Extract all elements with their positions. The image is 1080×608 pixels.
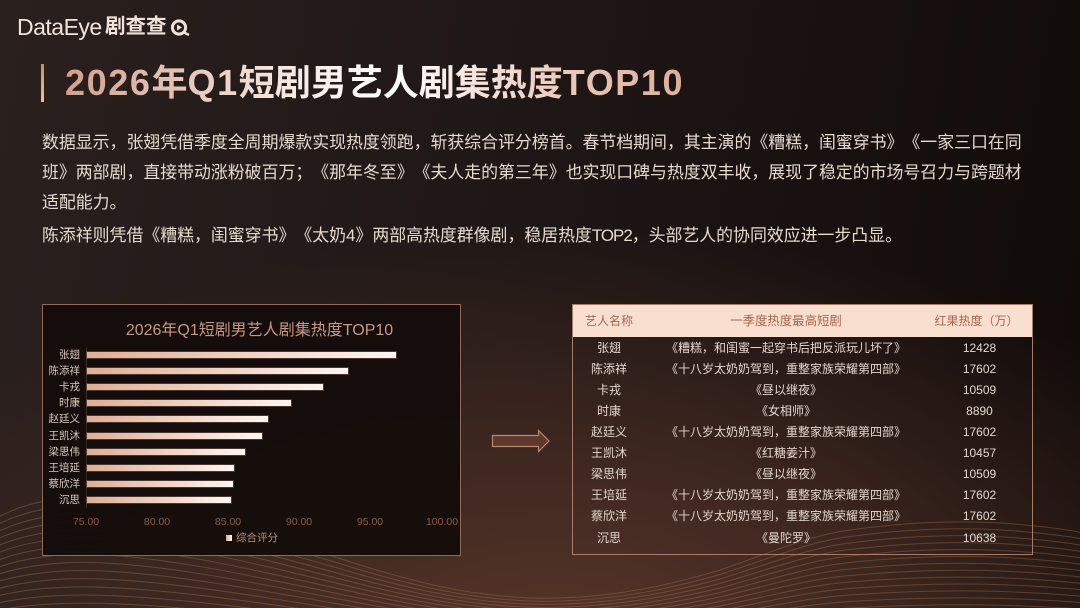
y axis labels: 沉思: [59, 494, 80, 506]
table rows: 10509: [963, 467, 996, 481]
table rows: 《十八岁太奶奶驾到，重整家族荣耀第四部》: [666, 425, 906, 439]
axis line: [86, 348, 87, 508]
table rows: 卡戎: [597, 383, 621, 397]
table rows: 《昼以继夜》: [750, 383, 822, 397]
table rows: [591, 341, 996, 545]
table rows: 17602: [963, 488, 996, 502]
logo: DataEye 剧查查: 剧查查: [105, 15, 166, 38]
table rows: 12428: [963, 341, 996, 355]
logo: DataEye 剧查查: DataEye: [17, 14, 102, 40]
table rows: 10509: [963, 383, 996, 397]
arrow: [492, 429, 550, 453]
logo: DataEye 剧查查: [17, 14, 190, 40]
table rows: 《十八岁太奶奶驾到，重整家族荣耀第四部》: [666, 509, 906, 523]
table rows: 《曼陀罗》: [756, 531, 816, 545]
x axis ticks: 95.00: [357, 516, 383, 528]
table rows: 蔡欣洋: [591, 509, 627, 523]
body text: 陈添祥则凭借《糟糕，闺蜜穿书》《太奶4》两部高热度群像剧，稳居热度TOP2，头部艺人的协同效应进一步凸显。: [42, 226, 902, 245]
y axis labels: 王培延: [48, 462, 80, 474]
y axis labels: 陈添祥: [48, 365, 80, 377]
y axis labels: 梁思伟: [48, 446, 80, 458]
y axis labels: 时康: [59, 397, 80, 409]
x axis ticks: 100.00: [426, 516, 458, 528]
x axis ticks: 80.00: [144, 516, 170, 528]
body text: [42, 133, 1022, 245]
title accent bar: [41, 64, 44, 102]
table rows: 《十八岁太奶奶驾到，重整家族荣耀第四部》: [666, 488, 906, 502]
icon: play ring: [170, 19, 190, 36]
table rows: 赵廷义: [591, 425, 627, 439]
table rows: 王培延: [591, 488, 627, 502]
legend: 综合评分: [236, 532, 278, 544]
table header: 红果热度（万）: [934, 314, 1018, 328]
table rows: 《糟糕，和闺蜜一起穿书后把反派玩儿坏了》: [666, 341, 906, 355]
y axis labels: [48, 349, 80, 506]
panel: table: [572, 304, 1033, 555]
table rows: 张翅: [597, 341, 621, 355]
table rows: 沉思: [597, 531, 621, 545]
y axis labels: 卡戎: [59, 381, 80, 393]
body text: 班》两部剧，直接带动涨粉破百万；《那年冬至》《夫人走的第三年》也实现口碑与热度双丰收，展现了稳定的市场号召力与跨题材: [42, 163, 1022, 182]
y axis labels: 蔡欣洋: [48, 478, 80, 490]
table rows: 17602: [963, 509, 996, 523]
table rows: 17602: [963, 362, 996, 376]
table header: 艺人名称: [585, 314, 633, 328]
table rows: 10457: [963, 446, 996, 460]
table rows: 王凯沐: [591, 446, 627, 460]
body text: 数据显示，张翅凭借季度全周期爆款实现热度领跑，斩获综合评分榜首。春节档期间，其主演的《糟糕，闺蜜穿书》《一家三口在同: [42, 133, 1022, 152]
table rows: 8890: [966, 404, 993, 418]
y axis labels: 赵廷义: [48, 413, 80, 425]
body text: 适配能力。: [42, 193, 126, 212]
x axis ticks: 90.00: [286, 516, 312, 528]
y axis labels: 王凯沐: [48, 430, 80, 442]
y axis labels: 张翅: [59, 349, 80, 361]
table header: 一季度热度最高短剧: [730, 314, 842, 328]
panel: bar chart: [42, 304, 461, 556]
table rows: 时康: [597, 404, 621, 418]
table header: [573, 305, 1032, 337]
x axis ticks: 85.00: [215, 516, 241, 528]
table rows: 17602: [963, 425, 996, 439]
table rows: 《十八岁太奶奶驾到，重整家族荣耀第四部》: [666, 362, 906, 376]
table rows: 《昼以继夜》: [750, 467, 822, 481]
table rows: 10638: [963, 531, 996, 545]
table rows: 《女相师》: [756, 404, 816, 418]
chart title: 2026年Q1短剧男艺人剧集热度TOP10: [126, 322, 393, 339]
table rows: 陈添祥: [591, 362, 627, 376]
bars: [86, 351, 397, 504]
table rows: 梁思伟: [591, 467, 627, 481]
x axis ticks: [73, 516, 458, 528]
x axis ticks: 75.00: [73, 516, 99, 528]
table rows: 《红糖姜汁》: [750, 446, 822, 460]
